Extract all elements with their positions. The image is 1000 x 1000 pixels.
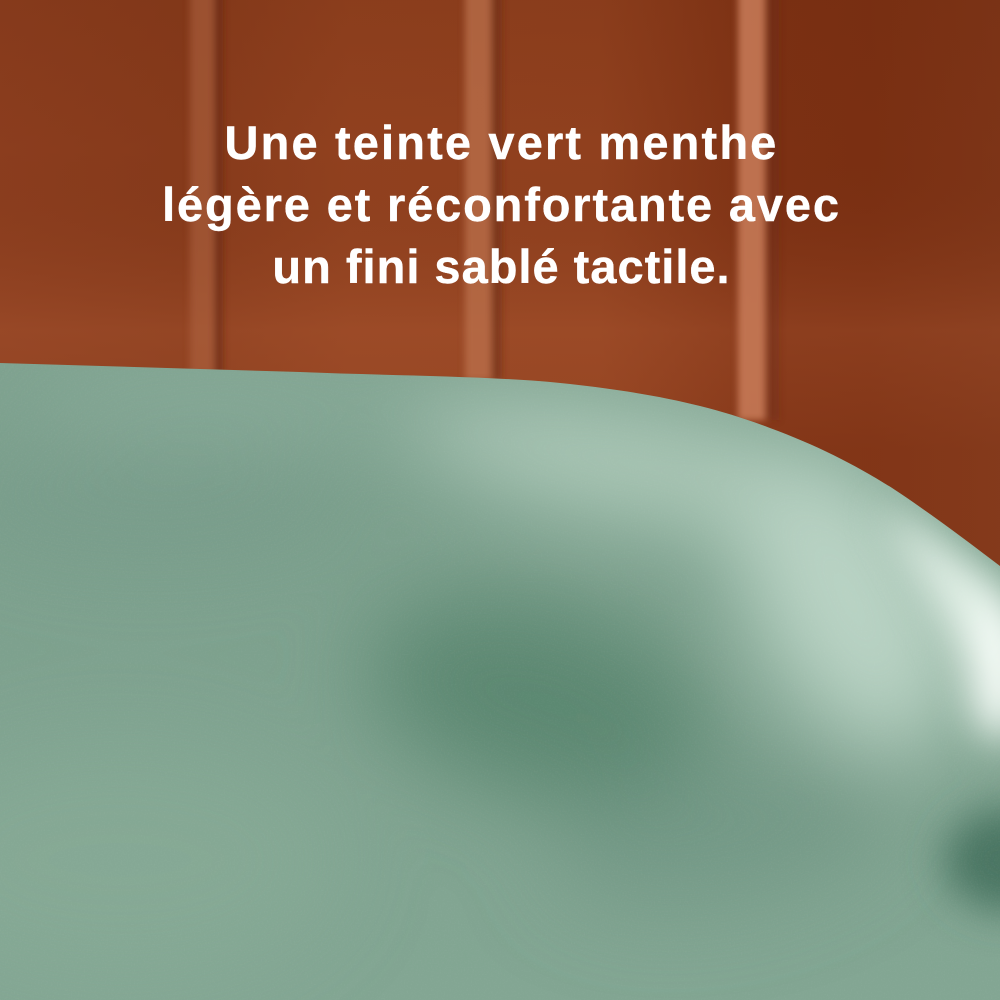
title: un fini sablé tactile. — [272, 240, 731, 293]
brick wall — [0, 0, 1000, 600]
title: légère et réconfortante avec — [162, 178, 841, 231]
title: Une teinte vert menthe — [224, 116, 778, 169]
title — [162, 116, 841, 293]
mint green object — [0, 363, 1000, 1000]
